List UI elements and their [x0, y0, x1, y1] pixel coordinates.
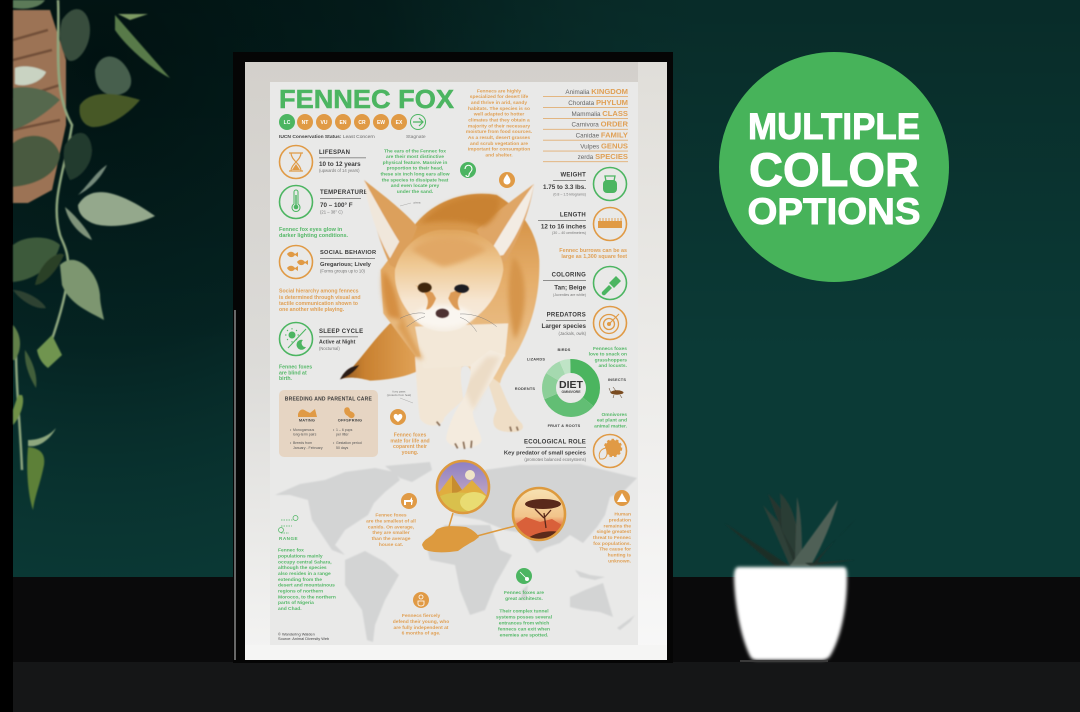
note: social hierarchy: is determined through visual and	[279, 295, 361, 301]
note: burrows: large as 1,300 square feet	[561, 254, 627, 260]
conservation status badges: CR	[358, 120, 366, 126]
panel: breeding and parental care: BREEDING AND PARENTAL CARE	[285, 397, 372, 403]
icon: heart	[390, 409, 406, 425]
note: snack on grasshoppers: and locusts.	[598, 363, 628, 369]
text block: range: Fennec fox	[278, 548, 304, 554]
tail	[340, 323, 420, 381]
note: social hierarchy	[279, 289, 361, 313]
text block: human predation: remains the	[604, 523, 631, 529]
note: eyes glow	[279, 227, 349, 239]
text block: human predation: predation	[609, 518, 631, 524]
icon: ruler	[594, 208, 626, 240]
diet donut chart: RODENTS	[515, 386, 535, 391]
panel: breeding and parental care: •	[290, 441, 292, 445]
icon: water drop	[499, 172, 515, 188]
text block: ears: the species to dissipate heat	[382, 177, 449, 183]
left ear	[364, 180, 417, 270]
icon: sun and moon	[280, 322, 312, 356]
fox body	[381, 194, 539, 383]
icon: ear	[460, 162, 476, 178]
text block: specialized for desert life: climates that they obtain a	[468, 118, 530, 124]
panel: breeding and parental care: Gestation period	[336, 441, 362, 445]
poster paper	[270, 82, 638, 645]
text block: range: extending from the	[278, 577, 322, 583]
taxonomy list: Canidae FAMILY	[576, 130, 628, 140]
text block: smallest canids: are the smallest of all	[366, 518, 417, 524]
paw and toes	[437, 422, 518, 449]
diet donut chart: BIRDS	[557, 347, 571, 352]
text block: smallest canids: house cat.	[379, 542, 404, 548]
text block: ears: are their most distinctive	[386, 154, 444, 160]
lizards segment	[549, 366, 593, 410]
panel: breeding and parental care: long-term pairs	[293, 432, 317, 436]
note: mate for life: Fennec foxes	[394, 432, 426, 438]
text block: specialized for desert life: and scrub vegetation are	[470, 141, 528, 147]
text block: great architects: systems posses several	[496, 615, 553, 621]
stat: length: LENGTH	[560, 213, 586, 219]
fruit and roots segment	[549, 366, 593, 410]
text block: defend young: 6 months of age.	[402, 631, 441, 637]
note: blind at birth	[279, 364, 312, 382]
note: omnivores: animal matter.	[594, 424, 628, 430]
note: snack on grasshoppers: love to snack on	[589, 352, 627, 358]
text block: human predation: fox populations.	[593, 541, 632, 547]
orange face marks	[415, 285, 470, 310]
note: snack on grasshoppers: grasshoppers	[595, 358, 627, 364]
note: blind at birth: Fennec foxes	[279, 364, 312, 370]
succulent plant	[724, 493, 858, 566]
text block: human predation	[593, 512, 632, 564]
text block: defend young: are fully independent at	[394, 625, 449, 631]
text block: specialized for desert life	[466, 88, 533, 158]
icon: fish group	[280, 246, 312, 278]
text block: smallest canids: they are smaller	[372, 530, 410, 536]
text block: ears: these six inch long ears allow	[380, 172, 450, 178]
stat: coloring: (Juveniles are white)	[553, 293, 586, 297]
icon: baby	[413, 592, 429, 608]
woven basket	[13, 10, 66, 203]
text block: specialized for desert life: well adapted to hotter	[473, 112, 524, 118]
anatomy label: pinna: pinna	[414, 200, 421, 204]
note: eyes glow: darker lighting conditions.	[279, 233, 349, 239]
shelf	[0, 577, 1080, 712]
anatomy label: pinna	[400, 200, 421, 206]
stat: predators: Larger species	[542, 323, 586, 330]
text block: human predation: unknown.	[608, 558, 632, 564]
badge: multiple color options: COLOR	[749, 143, 919, 196]
diet donut chart: DIET	[559, 379, 584, 391]
anatomy label: furry paws: (protects from heat)	[387, 393, 411, 397]
text block: great architects: entrances from which	[499, 620, 549, 626]
stat: ecological role: ECOLOGICAL ROLE	[524, 439, 586, 445]
text block: human predation: The cause for	[599, 547, 631, 553]
icon: paint brush	[594, 266, 626, 300]
text block: defend young: defend their young, who	[393, 619, 449, 625]
text block: smallest canids: Fennec foxes	[375, 513, 407, 519]
stat: length: (30 – 40 centimeters)	[552, 231, 586, 235]
illustration: desert circle	[437, 461, 489, 513]
icon: target	[594, 306, 626, 340]
icon: cat	[401, 493, 417, 509]
right ear inner	[487, 184, 534, 258]
panel: breeding and parental care: MATING	[299, 418, 315, 422]
icon: offspring	[344, 407, 355, 418]
text block: specialized for desert life: moisture from food sources.	[466, 129, 533, 135]
plant stems	[16, 0, 72, 470]
anatomy label: furry paws	[387, 390, 413, 403]
picture frame	[233, 52, 673, 663]
stat: temperature: (21 – 38° C)	[320, 210, 343, 214]
stat: weight: (0.8 – 1.5 kilograms)	[553, 192, 586, 196]
stat: sleep cycle: (Nocturnal)	[319, 346, 340, 351]
right hind leg	[488, 373, 523, 432]
text block: range: also resides in a range	[278, 571, 331, 577]
panel: breeding and parental care: Monogamous	[293, 428, 314, 432]
note: burrows: Fennec burrows can be as	[559, 248, 627, 254]
pot shadow line	[740, 660, 828, 662]
taxonomy list	[543, 87, 629, 162]
stat: length	[538, 208, 626, 240]
conservation status text: IUCN Conservation Status: Least Concern	[279, 134, 375, 140]
diet donut chart	[515, 347, 626, 428]
text block: great architects: Their complex tunnel	[499, 609, 549, 615]
note: omnivores: eat plant and	[597, 418, 627, 424]
text block: ears: and even locate prey	[391, 183, 439, 189]
icon: kettlebell	[594, 168, 626, 200]
conservation status text: Stagnate	[406, 134, 426, 140]
taxonomy list: Animalia KINGDOM	[565, 87, 628, 96]
icon: hourglass	[280, 146, 312, 178]
conservation status badges: NT	[302, 120, 308, 126]
panel: breeding and parental care: •	[333, 428, 335, 432]
note: social hierarchy: tactile communication shown to	[279, 301, 358, 307]
conservation status badges: EN	[340, 120, 347, 126]
panel: breeding and parental care: OFFSPRING	[338, 418, 362, 422]
fox photo	[340, 180, 539, 449]
icon: locust	[609, 387, 624, 398]
text block: great architects	[496, 590, 553, 638]
note: omnivores: Omnivores	[601, 412, 627, 418]
taxonomy list: Vulpes GENUS	[580, 141, 628, 150]
stat: weight: 1.75 to 3.3 lbs.	[543, 184, 586, 191]
text block: ears: physical feature. Massive in	[383, 160, 447, 166]
text block: ears	[380, 148, 450, 195]
tail tip	[340, 365, 359, 379]
stat: coloring: COLORING	[552, 273, 586, 279]
stat: lifespan: LIFESPAN	[319, 150, 350, 156]
text block: great architects: Fennec foxes are	[504, 590, 544, 596]
center leg	[446, 350, 505, 448]
text block: specialized for desert life: and shelter.	[485, 152, 513, 158]
text block: range: RANGE	[279, 536, 298, 541]
diet donut chart: OMNIVORE	[561, 390, 581, 394]
head	[395, 230, 503, 331]
credits	[278, 631, 329, 641]
conservation status badges: EW	[377, 120, 385, 126]
anatomy label: furry paws: furry paws	[393, 390, 406, 394]
leaves	[13, 0, 170, 510]
badge: multiple color options: OPTIONS	[748, 190, 920, 232]
stat: weight: WEIGHT	[560, 173, 586, 179]
taxonomy list: Chordata PHYLUM	[568, 98, 628, 107]
gap between legs	[461, 366, 471, 398]
stat: social behavior: (Forms groups up to 10)	[320, 269, 366, 274]
text block: range	[278, 536, 336, 612]
note: snack on grasshoppers	[589, 346, 628, 369]
panel: breeding and parental care: January - February	[293, 446, 323, 450]
note: mate for life: mate for life and	[390, 438, 430, 444]
credits: Source: Animal Diversity Web	[278, 636, 329, 641]
poster	[270, 82, 638, 645]
insects segment	[549, 366, 593, 410]
conservation status badges: LC	[284, 120, 291, 126]
stat: coloring	[543, 266, 626, 300]
diet donut chart: FRUIT & ROOTS	[548, 423, 581, 428]
panel: breeding and parental care: •	[290, 428, 292, 432]
note: eyes glow: Fennec fox eyes glow in	[279, 227, 343, 233]
callout: fox range on map	[422, 513, 515, 552]
text block: human predation: Human	[614, 512, 631, 518]
text block: ears: under the sand.	[397, 189, 434, 195]
text block: range: Morocco, to the northern	[278, 594, 336, 600]
text block: human predation: threat to Fennec	[593, 535, 631, 541]
stat: social behavior: Gregarious; Lively	[320, 262, 372, 268]
note: mate for life: young.	[402, 450, 419, 456]
note: blind at birth: are blind at	[279, 370, 307, 376]
note: social hierarchy: one another while playing.	[279, 307, 345, 313]
stat: predators: PREDATORS	[547, 312, 586, 318]
stat: ecological role: Key predator of small species	[504, 451, 586, 457]
text block: ears: The ears of the Fennec fox	[384, 148, 446, 154]
stat: lifespan: 10 to 12 years	[319, 161, 361, 168]
text block: specialized for desert life: important for consumption	[468, 147, 530, 153]
text block: range: and Chad.	[278, 606, 302, 612]
text block: smallest canids	[366, 513, 417, 548]
text block: smallest canids: than the average	[372, 536, 411, 542]
stat: length: 12 to 16 inches	[541, 224, 586, 230]
white plant pot	[734, 567, 847, 660]
text block: range: parts of Nigeria	[278, 600, 314, 606]
text block: range: populations mainly	[278, 554, 323, 560]
left ear inner	[364, 180, 399, 258]
mat board	[245, 62, 667, 660]
text block: specialized for desert life: habitats. The species is so	[468, 106, 530, 112]
icon: mating foxes	[298, 409, 317, 417]
birds segment	[549, 366, 593, 410]
stat: lifespan: (upwards of 14 years)	[319, 168, 360, 173]
stat: sleep cycle	[280, 322, 363, 356]
note: snack on grasshoppers: Fennecs foxes	[593, 346, 627, 352]
stat: temperature	[280, 186, 368, 218]
stat: ecological role	[504, 434, 626, 468]
chest	[415, 323, 508, 368]
conservation status badges	[279, 114, 426, 130]
icon: thermometer	[280, 186, 312, 218]
note: mate for life	[390, 432, 430, 456]
note: burrows	[559, 248, 627, 260]
eyes	[418, 283, 432, 293]
fur shading	[382, 196, 525, 410]
stat: sleep cycle: Active at Night	[319, 340, 356, 346]
text block: range: regions of northern	[278, 588, 323, 594]
right ear	[477, 184, 534, 270]
panel: breeding and parental care: •	[333, 441, 335, 445]
diet donut chart: LIZARDS	[527, 357, 545, 362]
note: mate for life: coparent their	[393, 444, 427, 450]
panel: breeding and parental care: per litter	[336, 432, 349, 436]
text block: range: desert and mountainous	[278, 583, 335, 589]
badge: multiple color options: MULTIPLE	[748, 105, 920, 147]
stat: lifespan	[280, 146, 366, 178]
text block: specialized for desert life: majority of their necessary	[468, 123, 530, 129]
text block: defend young	[393, 613, 449, 637]
stat: coloring: Tan; Beige	[554, 284, 586, 291]
taxonomy list: Carnivora ORDER	[572, 120, 629, 129]
left black strip	[0, 0, 13, 712]
text block: specialized for desert life: specialized for desert life	[470, 94, 528, 100]
title: FENNEC FOX	[279, 86, 454, 114]
text block: specialized for desert life: Fennecs are highly	[477, 88, 521, 94]
icon: gear and leaf	[594, 434, 626, 468]
text block: smallest canids: canids. On average,	[368, 524, 415, 530]
text block: range: although the species	[278, 565, 327, 571]
stat: temperature: 70 – 100° F	[320, 201, 353, 209]
text block: specialized for desert life: and thrive in arid, sandy	[471, 100, 527, 106]
note: social hierarchy: Social hierarchy among fennecs	[279, 289, 359, 295]
stat: sleep cycle: SLEEP CYCLE	[319, 329, 363, 335]
panel: breeding and parental care	[279, 390, 378, 457]
text block: range: occupy central Sahara,	[278, 559, 332, 565]
text block: great architects: fennecs can exit when	[498, 626, 550, 632]
conservation status text	[279, 134, 426, 140]
text block: human predation: single greatest	[596, 529, 631, 535]
credits: © Wandering Walden	[278, 631, 315, 636]
far left leg	[415, 357, 463, 425]
illustration: savanna circle	[513, 488, 565, 540]
stat: ecological role: (promotes balanced ecosystems)	[524, 457, 587, 462]
frame glint	[234, 310, 236, 660]
stat: weight	[543, 168, 626, 200]
stat: social behavior: SOCIAL BEHAVIOR	[320, 250, 376, 256]
stat: temperature: TEMPERATURE	[320, 190, 368, 196]
conservation status badges: EX	[396, 120, 403, 126]
icon: warning triangle	[614, 490, 630, 506]
icon: shovel	[516, 568, 532, 584]
taxonomy list: zerda SPECIES	[578, 152, 628, 161]
icon: range route	[278, 516, 298, 533]
panel: breeding and parental care: 50 days	[336, 446, 349, 450]
text block: great architects: great architects.	[505, 596, 544, 602]
stat: social behavior	[280, 246, 376, 278]
text block: human predation: hunting is	[608, 552, 631, 558]
badge: multiple color options	[719, 52, 949, 282]
world map	[275, 462, 637, 642]
stat: predators	[542, 306, 626, 340]
panel: breeding and parental care: 1 – 6 pups	[336, 428, 353, 432]
note: blind at birth: birth.	[279, 376, 293, 382]
taxonomy list: Mammalia CLASS	[571, 109, 628, 118]
text block: specialized for desert life: As a result, desert grasses	[468, 135, 530, 141]
text block: ears: proportion to their head,	[387, 166, 444, 172]
whiskers	[400, 313, 497, 332]
text block: defend young: Fennecs fiercely	[402, 613, 440, 619]
hanging plant	[13, 0, 170, 510]
conservation status badges: VU	[321, 120, 328, 126]
diet donut chart: INSECTS	[608, 377, 626, 382]
panel: breeding and parental care: Breeds from	[293, 441, 312, 445]
text block: great architects: enemies are spotted.	[500, 632, 549, 638]
stat: predators: (Jackals, owls)	[559, 331, 587, 336]
nose	[436, 309, 449, 318]
rodents segment	[549, 366, 593, 410]
note: omnivores	[594, 412, 628, 430]
